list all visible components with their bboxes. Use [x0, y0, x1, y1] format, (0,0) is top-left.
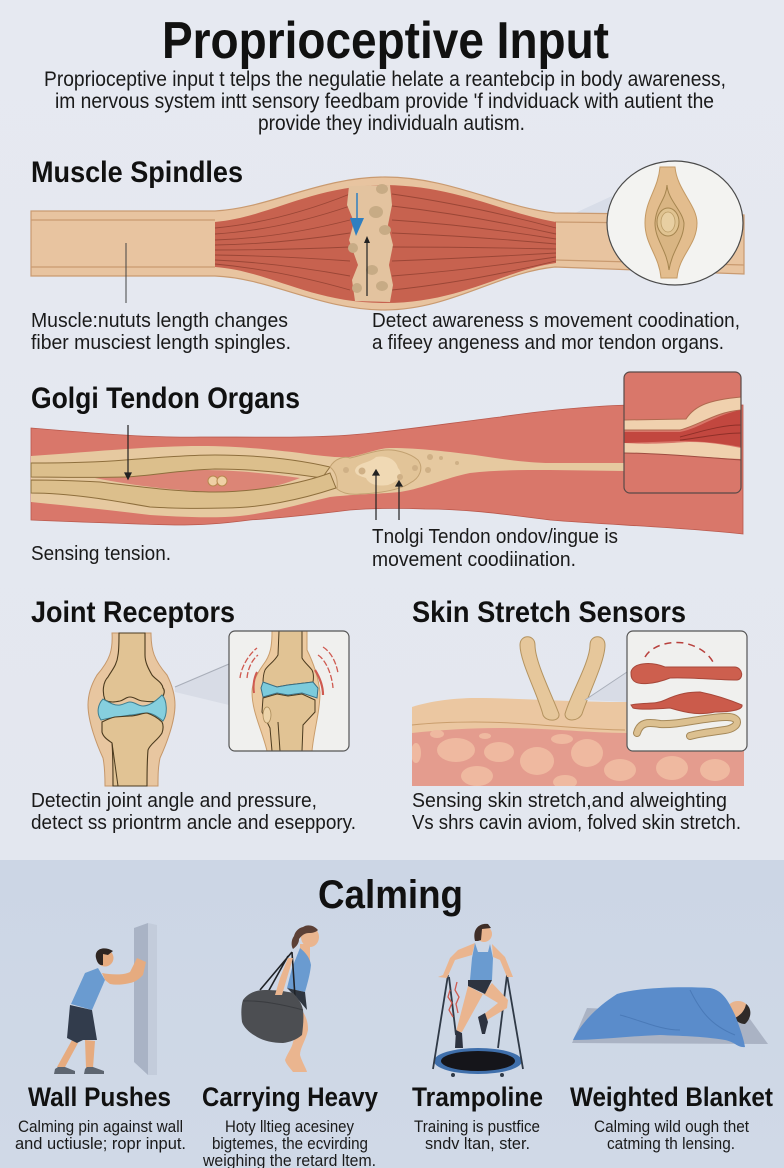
- joint capsule: [88, 633, 175, 786]
- connector: [175, 664, 229, 705]
- spindle dots: [348, 184, 391, 293]
- pressure marks: [240, 647, 338, 695]
- activity: trampoline: Training is pustfice: [414, 1118, 540, 1136]
- fat cells: [411, 730, 730, 789]
- heading: joint receptors: Joint Receptors: [31, 596, 235, 629]
- activity: carrying heavy: Carrying Heavy: [202, 1082, 378, 1112]
- muscle spindle captions: Detect awareness s movement coodination,: [372, 310, 740, 332]
- spindle core: [347, 185, 393, 302]
- joint and skin captions: Sensing skin stretch,and alweighting: [412, 790, 727, 812]
- lower tendon strand: [31, 473, 336, 508]
- activity: wall pushes: Calming pin against wall: [18, 1118, 183, 1136]
- joint and skin captions: Vs shrs cavin aviom, folved skin stretch.: [412, 812, 741, 834]
- calming heading: Calming: [318, 873, 463, 917]
- muscle spindle captions: a fifeey angeness and mor tendon organs.: [372, 332, 724, 354]
- blue arrow: [350, 193, 364, 236]
- cartilage: [98, 695, 166, 721]
- femur: [103, 633, 164, 702]
- golgi inset: [624, 372, 741, 493]
- activity: weighted blanket: catming th lensing.: [607, 1135, 735, 1153]
- magnifier circle: [607, 161, 743, 285]
- small cell: [208, 476, 227, 486]
- joint and skin captions: detect ss priontrm ancle and eseppory.: [31, 812, 356, 834]
- tibia: [102, 713, 163, 786]
- intro text: im nervous system intt sensory feedbam provide 'f indviduack with autient the: [55, 90, 714, 113]
- muscle belly: [215, 185, 556, 303]
- activity: weighted blanket: Calming wild ough thet: [594, 1118, 749, 1136]
- activity: carrying heavy: Hoty lltieg acesiney: [225, 1118, 355, 1136]
- black arrow: [364, 236, 370, 296]
- activity: wall pushes: and uctiusle; ropr input.: [15, 1135, 186, 1153]
- title: Proprioceptive Input: [162, 12, 609, 70]
- golgi arrows: [125, 425, 402, 520]
- activity: trampoline: Trampoline: [412, 1082, 543, 1112]
- muscle spindle captions: Muscle:nututs length changes: [31, 310, 288, 332]
- golgi captions: movement coodiination.: [372, 549, 576, 571]
- golgi organ: [330, 450, 421, 494]
- icon: wall pushes: [54, 923, 157, 1075]
- organ spots: [343, 454, 459, 480]
- muscle spindle captions: [31, 310, 740, 354]
- heading: muscle spindles: Muscle Spindles: [31, 156, 243, 189]
- organ light centre: [355, 457, 400, 486]
- activity: wall pushes: [15, 1082, 186, 1153]
- activity: carrying heavy: [202, 1082, 378, 1168]
- joint diagram: [88, 633, 229, 786]
- golgi tendon diagram: [31, 372, 743, 534]
- activity: weighted blanket: [570, 1082, 773, 1153]
- joint and skin captions: [31, 790, 741, 834]
- activity: trampoline: sndv ltan, ster.: [425, 1135, 530, 1153]
- heading: skin stretch sensors: Skin Stretch Sensors: [412, 596, 686, 629]
- activity: wall pushes: Wall Pushes: [28, 1082, 171, 1112]
- tendon and muscle sheath: [31, 177, 744, 310]
- muscle fibres: [215, 194, 556, 290]
- pointer line: [125, 243, 127, 303]
- heading: golgi tendon organs: Golgi Tendon Organs: [31, 382, 300, 415]
- icon: weighted blanket: [572, 987, 768, 1047]
- golgi captions: [31, 526, 618, 571]
- panel: calming: [0, 860, 784, 1168]
- golgi captions: Tnolgi Tendon ondov/ingue is: [372, 526, 618, 548]
- intro text: Proprioceptive input t telps the negulatie helate a reantebcip in body awareness,: [44, 68, 726, 91]
- tendon sheath: [31, 446, 624, 517]
- skin inset: [627, 631, 747, 751]
- stretch sensor stalks: [520, 637, 605, 720]
- skin tissue: [412, 698, 744, 786]
- dermis: [412, 728, 744, 786]
- upper tendon strand: [31, 455, 330, 478]
- connector: [585, 672, 627, 702]
- connector to magnifier: [575, 196, 612, 240]
- activity: trampoline: [412, 1082, 543, 1153]
- centre gap: [95, 470, 300, 492]
- muscle band: [31, 405, 743, 534]
- icon: carrying heavy: [241, 925, 319, 1072]
- muscle spindle captions: fiber musciest length spingles.: [31, 332, 291, 354]
- activity: carrying heavy: bigtemes, the ecvirding: [212, 1135, 368, 1153]
- intro text: [44, 68, 726, 135]
- joint inset: [229, 631, 349, 751]
- intro text: provide they individualn autism.: [258, 112, 525, 135]
- joint and skin captions: Detectin joint angle and pressure,: [31, 790, 317, 812]
- muscle spindle diagram: [31, 161, 744, 310]
- icon: trampoline: [433, 924, 523, 1077]
- golgi captions: Sensing tension.: [31, 543, 171, 565]
- skin diagram: [411, 631, 747, 789]
